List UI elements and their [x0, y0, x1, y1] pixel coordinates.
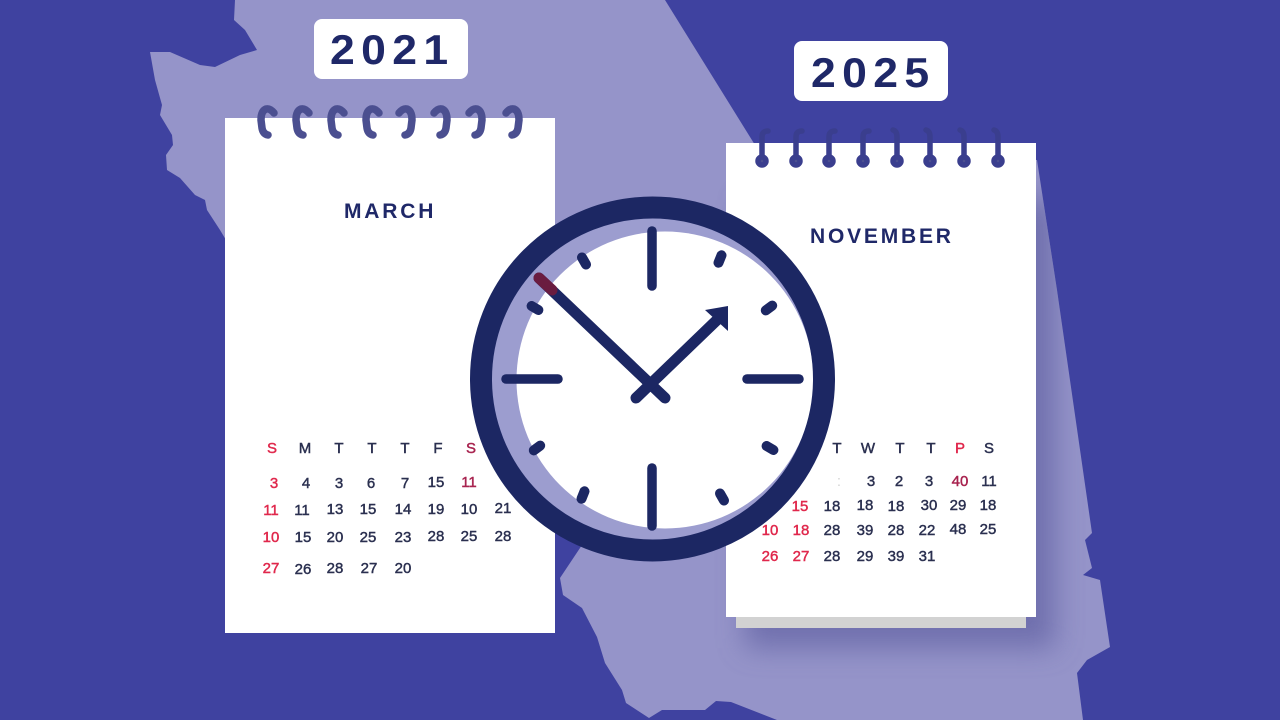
date grid March: 28: [327, 560, 343, 577]
date grid March: 27: [263, 560, 279, 577]
date grid March: 3: [270, 475, 278, 492]
infographic canvas: [150, 0, 1110, 720]
date grid March: T: [334, 440, 344, 457]
date grid March: 20: [327, 529, 343, 546]
date grid March: 28: [428, 528, 444, 545]
date grid March: S: [466, 440, 476, 457]
date grid November: T: [926, 440, 936, 457]
date grid November: 39: [857, 522, 873, 539]
date grid November: 18: [888, 498, 904, 515]
date grid March: 25: [360, 529, 376, 546]
date grid November: T: [895, 440, 905, 457]
date grid March: 14: [395, 501, 411, 518]
date grid November: 10: [762, 522, 778, 539]
calendar: March 2021: [225, 109, 555, 633]
date grid November: 3: [925, 473, 933, 490]
date grid November: T: [832, 440, 842, 457]
clock rim: [481, 208, 824, 550]
date grid November: 40: [952, 473, 968, 490]
date grid March: F: [433, 440, 443, 457]
calendar: November 2025: [726, 130, 1036, 628]
date grid November: 39: [888, 548, 904, 565]
date grid November: 30: [921, 497, 937, 514]
date grid March: 10: [263, 529, 279, 546]
date grid March: T: [367, 440, 377, 457]
date grid March: S: [267, 440, 277, 457]
date grid November: S: [984, 440, 994, 457]
date grid November: 26: [762, 548, 778, 565]
date grid November: 18: [824, 498, 840, 515]
date grid March: T: [400, 440, 410, 457]
date grid March: 27: [361, 560, 377, 577]
date grid March: 3: [335, 475, 343, 492]
date grid March: 19: [428, 501, 444, 518]
date grid November: W: [861, 440, 876, 457]
date grid November: 31: [919, 548, 935, 565]
date grid March: 7: [401, 475, 409, 492]
date grid March: 25: [461, 528, 477, 545]
date grid March: 15: [428, 474, 444, 491]
date grid November: 22: [919, 522, 935, 539]
month heading November: NOVEMBER: [810, 225, 954, 248]
date grid November: 28: [824, 548, 840, 565]
date grid March: 21: [495, 500, 511, 517]
date grid March: 11: [294, 502, 310, 519]
date grid November: [762, 440, 997, 565]
binder rings right calendar: [758, 130, 1002, 165]
date grid November: 18: [980, 497, 996, 514]
date grid November: 28: [888, 522, 904, 539]
date grid March: 11: [263, 502, 279, 519]
date grid March: 13: [327, 501, 343, 518]
date grid November: 11: [981, 473, 997, 490]
calendar shadow on map: [745, 200, 1055, 648]
date grid March: M: [299, 440, 311, 457]
date grid March: 15: [295, 529, 311, 546]
date grid March: 26: [295, 561, 311, 578]
date grid March: 6: [367, 475, 375, 492]
date grid November: :: [837, 473, 841, 490]
date grid March: [263, 440, 511, 578]
minute hand: [539, 278, 665, 398]
date grid March: 15: [360, 501, 376, 518]
date grid November: 18: [793, 522, 809, 539]
date grid March: 23: [395, 529, 411, 546]
month heading March: MARCH: [344, 200, 436, 223]
date grid March: 11: [461, 474, 477, 491]
binder rings left calendar: [261, 109, 519, 135]
clock face: [516, 232, 814, 528]
year label 2021: 2021: [330, 27, 454, 74]
date grid March: 20: [395, 560, 411, 577]
date grid November: 27: [793, 548, 809, 565]
date grid November: 18: [857, 497, 873, 514]
date grid November: 28: [824, 522, 840, 539]
clock: [480, 207, 824, 551]
date grid November: 15: [792, 498, 808, 515]
date grid March: 10: [461, 501, 477, 518]
map silhouette: [150, 0, 1110, 720]
hour ticks: [506, 231, 799, 526]
date grid March: 28: [495, 528, 511, 545]
year label 2025: 2025: [811, 50, 935, 97]
date grid November: P: [955, 440, 965, 457]
year label 2025: [794, 41, 948, 101]
date grid March: 4: [302, 475, 310, 492]
date grid November: 48: [950, 521, 966, 538]
date grid November: 25: [980, 521, 996, 538]
date grid November: 29: [857, 548, 873, 565]
hour hand: [636, 306, 728, 398]
year label 2021: [314, 19, 468, 79]
date grid November: 2: [895, 473, 903, 490]
date grid November: 29: [950, 497, 966, 514]
date grid November: 3: [867, 473, 875, 490]
